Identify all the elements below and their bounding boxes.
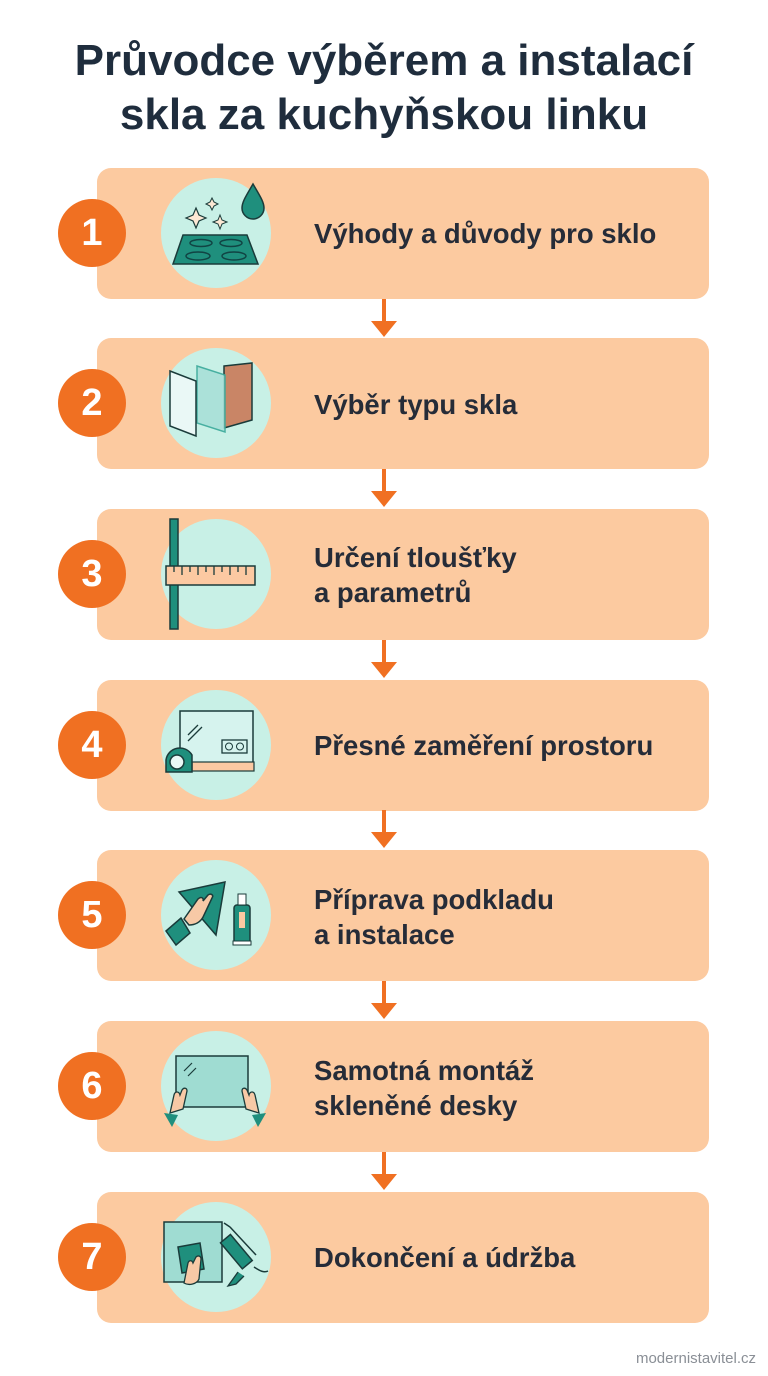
number 5	[58, 881, 126, 949]
icon: hob with sparkles and drop	[161, 178, 271, 288]
text 6	[314, 1055, 534, 1121]
icon: ruler and glass edge	[161, 518, 271, 630]
text 3: Určení tloušťky	[314, 542, 517, 573]
number 6	[58, 1052, 126, 1120]
number 3: 3	[81, 553, 103, 595]
number 4	[58, 711, 126, 779]
number 3	[58, 540, 126, 608]
number 4: 4	[81, 724, 103, 766]
text 6: skleněné desky	[314, 1090, 517, 1121]
arrow 1	[371, 299, 397, 337]
icon: tape measure and wall	[161, 690, 271, 800]
text 3	[314, 542, 517, 608]
title: skla za kuchyňskou linku	[120, 90, 648, 139]
panel: step 5	[97, 850, 709, 981]
footer: source: modernistavitel.cz	[636, 1350, 756, 1367]
title: Průvodce výběrem a instalací	[75, 36, 693, 85]
icon: cloth and adhesive tube	[161, 860, 271, 970]
number 1: 1	[81, 212, 103, 254]
title	[75, 36, 695, 139]
icon: hands holding glass panel	[161, 1031, 271, 1141]
arrow 5	[371, 981, 397, 1019]
arrow 6	[371, 1152, 397, 1190]
panel: step 2	[97, 338, 709, 469]
number 5: 5	[81, 894, 103, 936]
number 2: 2	[81, 382, 103, 424]
icon: glass samples	[161, 348, 271, 458]
arrow 2	[371, 469, 397, 507]
arrow 4	[371, 810, 397, 848]
text 7: Dokončení a údržba	[314, 1242, 575, 1273]
panel: step 4	[97, 680, 709, 811]
panel: step 3	[97, 509, 709, 640]
text 5	[314, 884, 554, 950]
number 1	[58, 199, 126, 267]
text 4: Přesné zaměření prostoru	[314, 730, 653, 761]
arrow 3	[371, 640, 397, 678]
panel: step 1	[97, 168, 709, 299]
text 5: a instalace	[314, 919, 455, 950]
icon: cleaning and silicone gun	[161, 1202, 271, 1312]
text 3: a parametrů	[314, 577, 471, 608]
number 7: 7	[81, 1236, 103, 1278]
number 2	[58, 369, 126, 437]
number 7	[58, 1223, 126, 1291]
panel: step 7	[97, 1192, 709, 1323]
panel: step 6	[97, 1021, 709, 1152]
text 5: Příprava podkladu	[314, 884, 554, 915]
number 6: 6	[81, 1065, 103, 1107]
text 2: Výběr typu skla	[314, 389, 517, 420]
text 1: Výhody a důvody pro sklo	[314, 218, 656, 249]
text 6: Samotná montáž	[314, 1055, 534, 1086]
